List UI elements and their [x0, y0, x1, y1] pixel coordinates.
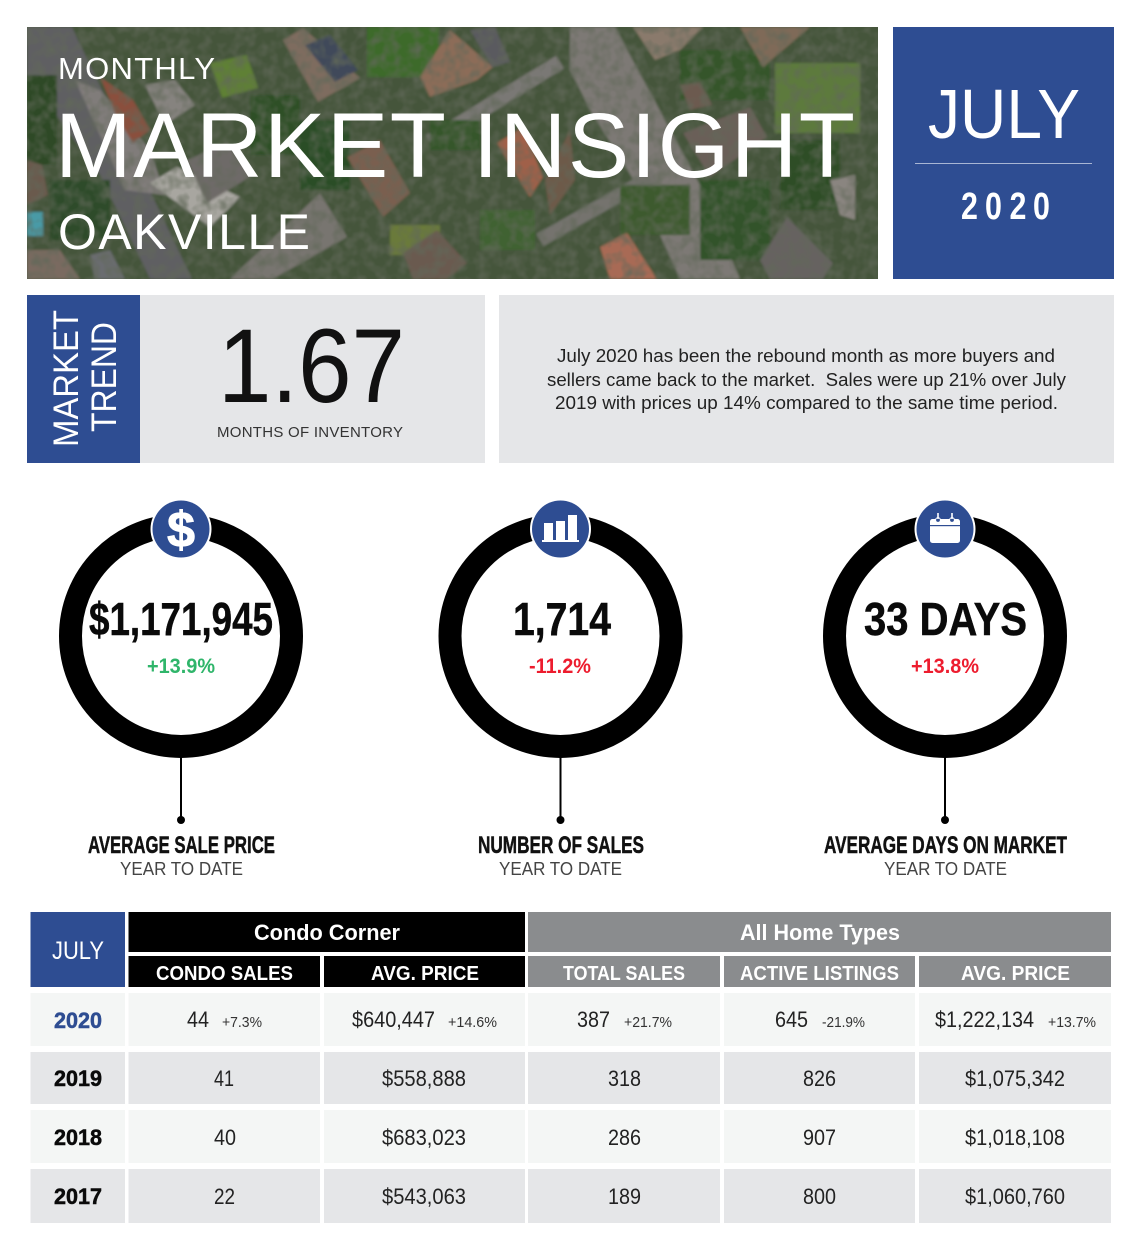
column: condo sales: CONDO SALES: [156, 963, 293, 985]
commentary text: [547, 346, 1066, 413]
row 2019: 318: [608, 1066, 641, 1091]
row 2019: $1,075,342: [965, 1066, 1065, 1091]
ring: [834, 526, 1056, 746]
aerial photo of neighbourhood: [20, 20, 890, 285]
label: NUMBER OF SALES: [478, 832, 644, 859]
row 2020: 44: [187, 1007, 209, 1032]
commentary text: 2019 with prices up 14% compared to the same time period.: [555, 393, 1058, 413]
condo corner heading: Condo Corner: [254, 920, 400, 945]
connector: [941, 757, 949, 824]
row 2017: 800: [803, 1184, 836, 1209]
row 2017: $543,063: [382, 1184, 466, 1209]
commentary text: July 2020 has been the rebound month as more buyers and: [557, 346, 1055, 366]
row 2017: 22: [214, 1184, 235, 1209]
stat: average days on market: [824, 498, 1067, 879]
row 2019: $558,888: [382, 1066, 466, 1091]
row 2019: [30, 1052, 1111, 1104]
row 2020: 2020: [54, 1008, 102, 1033]
commentary text: sellers came back to the market. Sales were up 21% over July: [547, 370, 1066, 390]
row 2020: 645: [775, 1007, 808, 1032]
label: market trend vertical: MARKET: [47, 310, 86, 447]
column: active listings: [724, 956, 915, 987]
row 2020: +21.7%: [624, 1014, 672, 1031]
column: condo avg price: AVG. PRICE: [371, 963, 479, 985]
column: active listings: ACTIVE LISTINGS: [740, 963, 899, 985]
all home types heading: All Home Types: [740, 920, 900, 945]
row 2020: +13.7%: [1048, 1014, 1096, 1031]
label: market trend vertical: TREND: [85, 322, 124, 432]
icon: bar chart: [530, 498, 591, 560]
column: total sales: [528, 956, 720, 987]
sublabel: YEAR TO DATE: [884, 859, 1007, 879]
date panel: [893, 27, 1114, 279]
value: 33 DAYS: [864, 593, 1027, 645]
stat: number of sales: [450, 498, 671, 879]
data table: [30, 912, 1111, 1223]
icon: calendar: [914, 498, 976, 560]
month cell: JULY: [52, 937, 104, 965]
row 2018: 2018: [54, 1125, 102, 1150]
ring: [450, 526, 671, 746]
row 2020: 387: [577, 1007, 610, 1032]
row 2018: 907: [803, 1125, 836, 1150]
row 2018: $683,023: [382, 1125, 466, 1150]
row 2019: 826: [803, 1066, 836, 1091]
ring: [70, 526, 292, 746]
header banner: aerial photo with title: [20, 20, 890, 285]
panel: market commentary: [499, 295, 1114, 463]
row 2019: 2019: [54, 1066, 102, 1091]
stat: average sale price: [70, 498, 292, 879]
table header: [30, 912, 1111, 987]
row 2020: +14.6%: [448, 1014, 497, 1031]
row 2020: [30, 993, 1111, 1046]
column: total sales: TOTAL SALES: [563, 963, 685, 985]
months of inventory label: MONTHS OF INVENTORY: [217, 424, 403, 441]
label: market trend vertical: [47, 310, 124, 447]
row 2018: $1,018,108: [965, 1125, 1065, 1150]
row 2017: $1,060,760: [965, 1184, 1065, 1209]
connector: [556, 757, 564, 824]
row 2020: +7.3%: [222, 1014, 262, 1031]
all home types heading: [528, 912, 1111, 952]
row 2018: 40: [214, 1125, 236, 1150]
row 2017: 2017: [54, 1184, 102, 1209]
label: AVERAGE SALE PRICE: [88, 832, 275, 859]
icon: dollar: [150, 498, 212, 560]
month cell: [30, 912, 125, 987]
column: avg price: [919, 956, 1111, 987]
connector: [177, 757, 185, 824]
change: +13.9%: [147, 655, 215, 678]
column: condo sales: [128, 956, 320, 987]
row 2018: 286: [608, 1125, 641, 1150]
row 2020: -21.9%: [822, 1014, 865, 1031]
column: condo avg price: [324, 956, 525, 987]
row 2020: $1,222,134: [935, 1007, 1034, 1032]
row 2020: $640,447: [352, 1007, 435, 1032]
change: +13.8%: [911, 655, 979, 678]
panel: market trend: [27, 295, 485, 463]
icon: dollar: $: [167, 502, 195, 558]
change: -11.2%: [529, 655, 591, 678]
months of inventory value: 1.67: [218, 308, 405, 425]
condo corner heading: [128, 912, 525, 952]
year: 2020: [961, 186, 1050, 228]
month: JULY: [928, 75, 1080, 153]
value: $1,171,945: [89, 593, 273, 645]
sublabel: YEAR TO DATE: [120, 859, 243, 879]
value: 1,714: [513, 593, 611, 645]
title: market insight: MARKET INSIGHT: [55, 95, 855, 197]
column: avg price: AVG. PRICE: [961, 963, 1070, 985]
sublabel: YEAR TO DATE: [499, 859, 622, 879]
title: oakville: OAKVILLE: [58, 204, 310, 260]
row 2018: [30, 1110, 1111, 1163]
row 2019: 41: [214, 1066, 234, 1091]
row 2017: [30, 1169, 1111, 1223]
title: monthly: MONTHLY: [58, 51, 215, 86]
row 2017: 189: [608, 1184, 641, 1209]
